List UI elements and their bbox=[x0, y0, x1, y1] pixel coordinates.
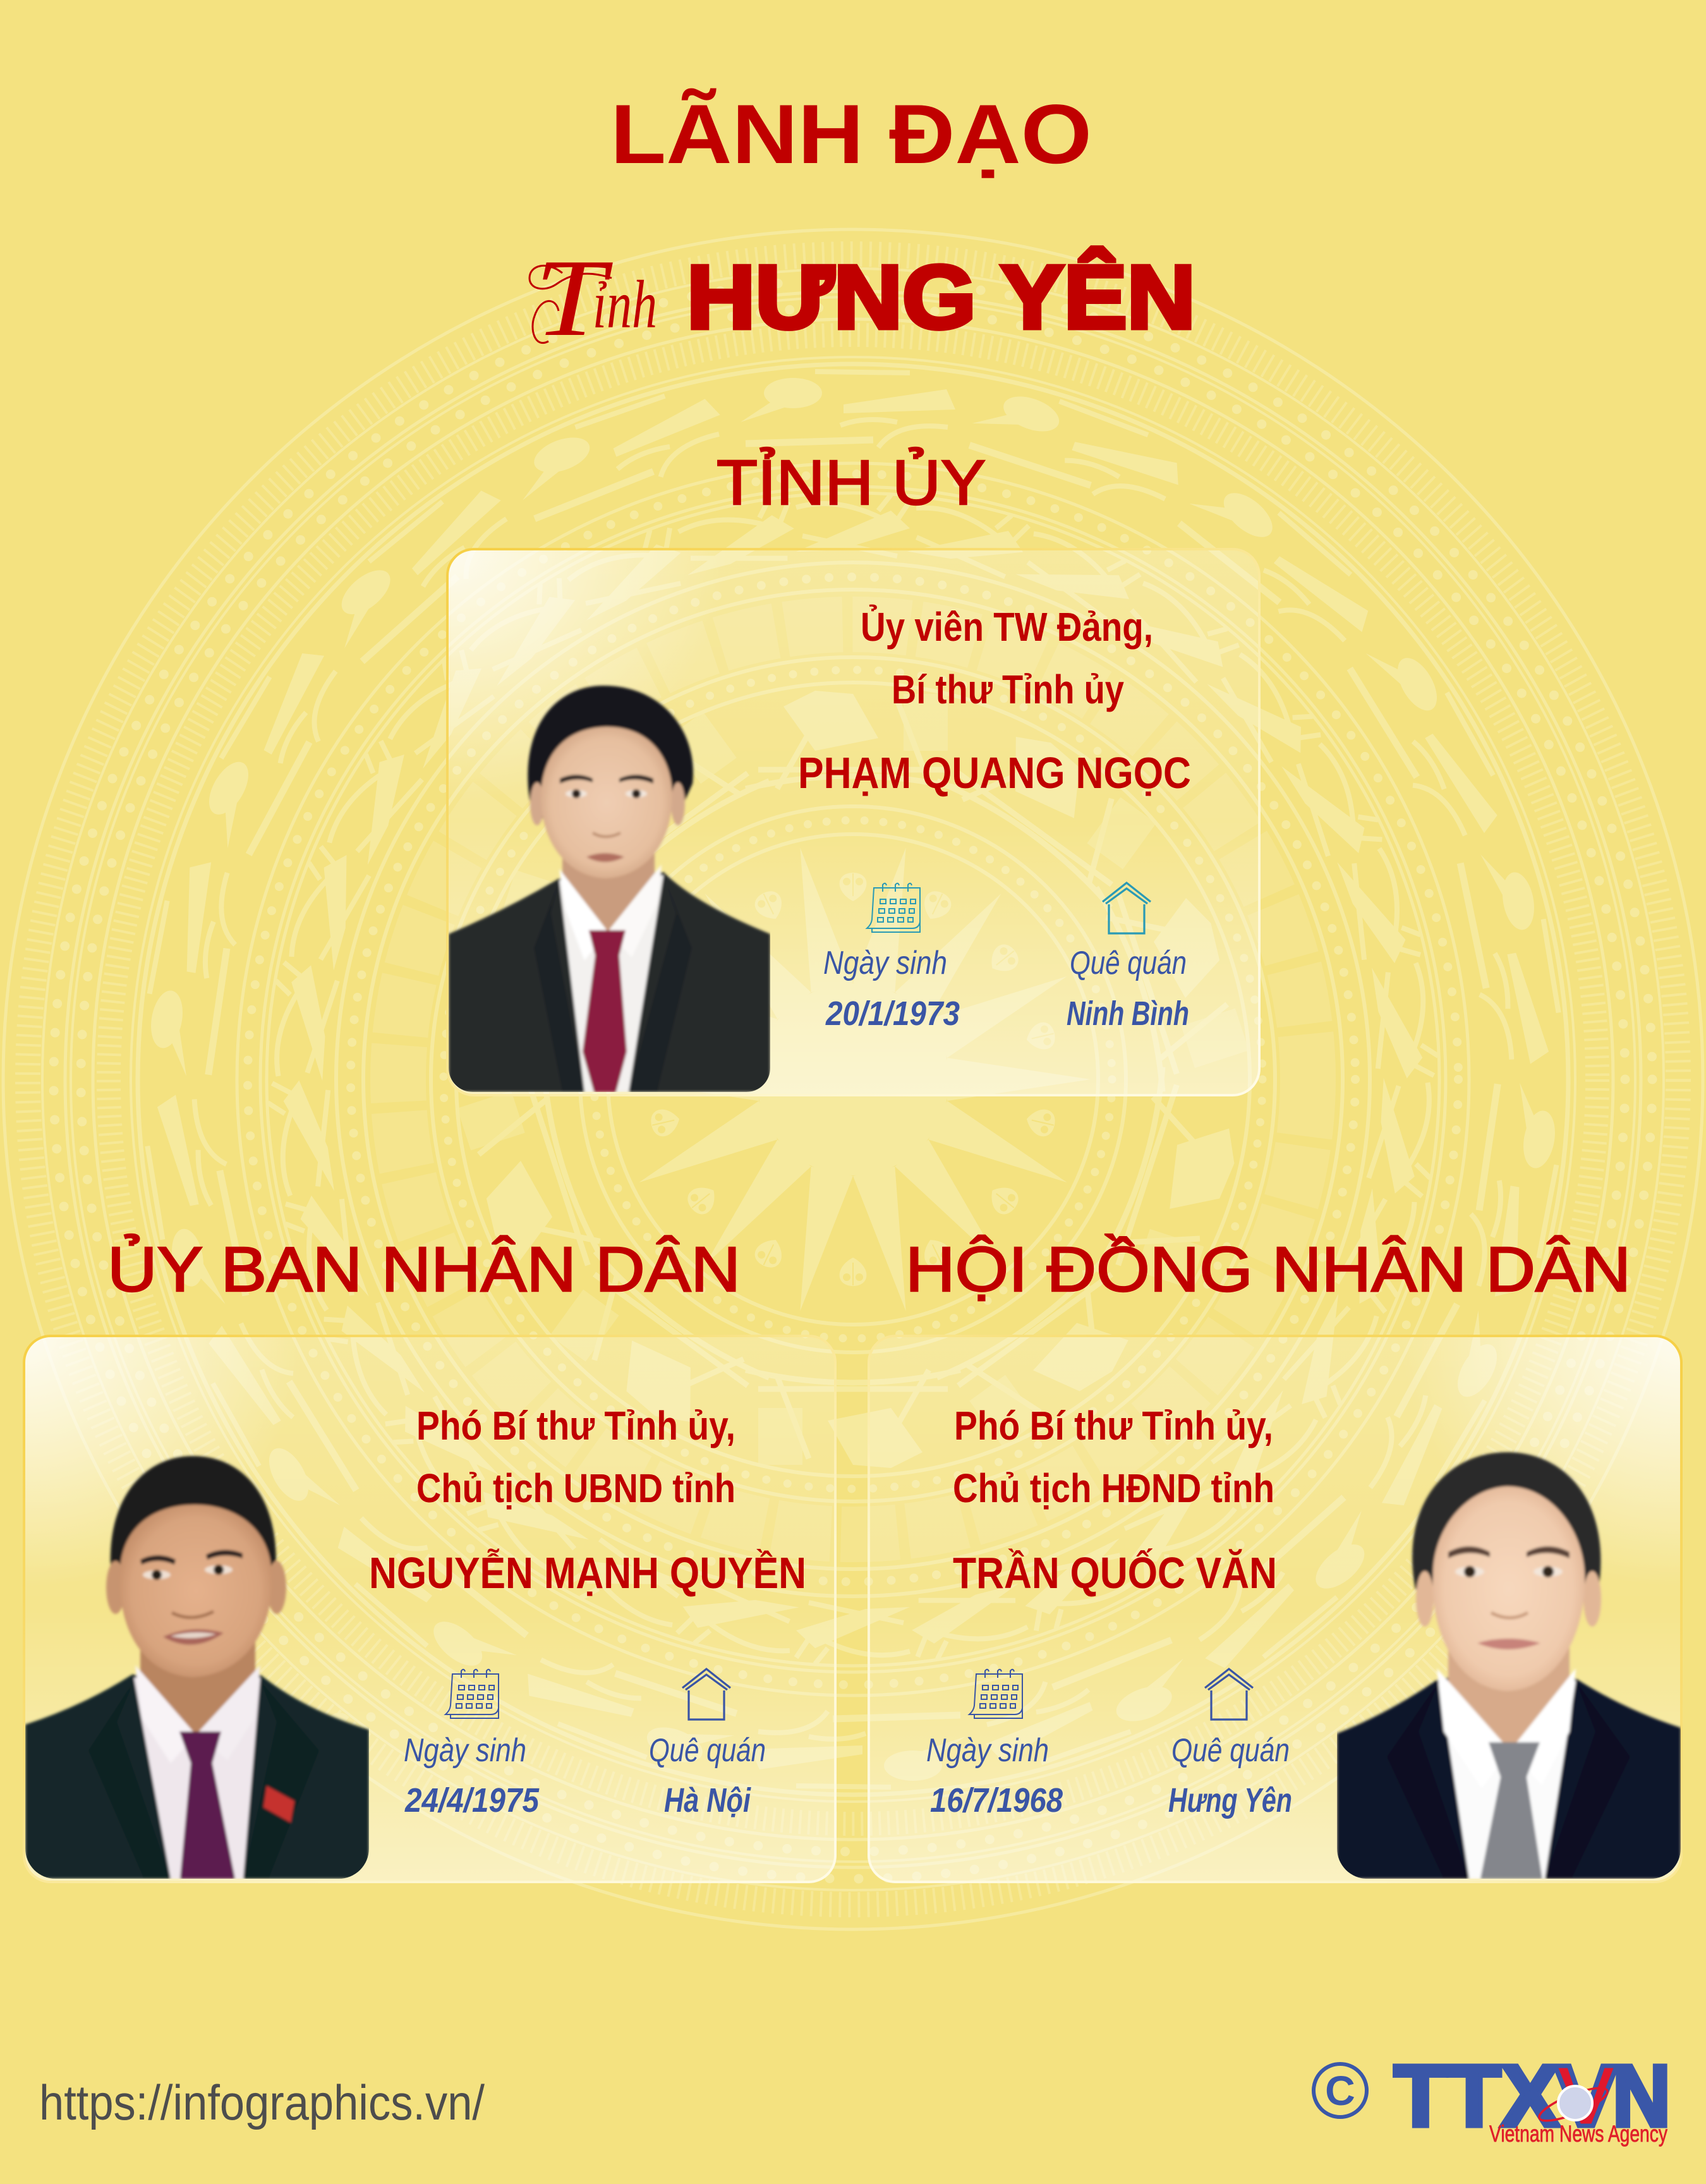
birth date: Ngày sinh bbox=[823, 945, 947, 981]
hometown: Hưng Yên bbox=[1168, 1781, 1292, 1819]
bronze drum background pattern bbox=[0, 229, 1706, 1929]
copyright mark: C bbox=[1325, 2067, 1355, 2114]
letters TTX: TTX bbox=[1394, 2048, 1559, 2145]
heading: TỈNH ỦY: TỈNH ỦY bbox=[717, 447, 986, 518]
bold words HƯNG YÊN: HƯNG YÊN bbox=[687, 247, 1195, 348]
panel: Tỉnh ủy card bbox=[447, 549, 1259, 1095]
hometown: Hà Nội bbox=[664, 1781, 751, 1819]
role text: Ủy viên TW Đảng, bbox=[861, 604, 1153, 650]
script word Tỉnh: ỉnh bbox=[593, 267, 657, 343]
icon: calendar bbox=[969, 1670, 1022, 1718]
birth date: 20/1/1973 bbox=[825, 995, 960, 1033]
globe bbox=[1536, 2082, 1611, 2127]
role text: Phó Bí thư Tỉnh ủy, bbox=[416, 1403, 735, 1448]
name: TRẦN QUỐC VĂN bbox=[953, 1548, 1277, 1598]
birth date bbox=[926, 1732, 1063, 1819]
birth date: Ngày sinh bbox=[926, 1732, 1049, 1769]
icon: calendar bbox=[445, 1670, 499, 1718]
portrait: Phạm Quang Ngọc bbox=[449, 686, 770, 1092]
panel: Ủy ban nhân dân card bbox=[24, 1336, 835, 1882]
role text: Chủ tịch HĐND tỉnh bbox=[953, 1465, 1274, 1511]
title: Tỉnh HƯNG YÊN bbox=[529, 236, 1195, 359]
birth date bbox=[404, 1732, 540, 1819]
birth date: 24/4/1975 bbox=[404, 1781, 540, 1819]
hometown bbox=[1168, 1732, 1292, 1819]
portrait: Trần Quốc Văn bbox=[1337, 1452, 1681, 1879]
hometown bbox=[1067, 945, 1189, 1033]
role text: Phó Bí thư Tỉnh ủy, bbox=[954, 1403, 1273, 1448]
logo: TTXVN bbox=[1394, 2048, 1671, 2147]
icon: house bbox=[1103, 883, 1151, 933]
letter V: V bbox=[1554, 2048, 1618, 2145]
name: NGUYỄN MẠNH QUYỀN bbox=[369, 1548, 806, 1598]
role text bbox=[953, 1403, 1274, 1511]
card background bbox=[24, 1336, 835, 1882]
letter N: N bbox=[1612, 2048, 1671, 2145]
panel: Hội đồng nhân dân card bbox=[869, 1336, 1681, 1882]
role text bbox=[861, 604, 1153, 712]
role text: Chủ tịch UBND tỉnh bbox=[416, 1465, 735, 1511]
portrait: Nguyễn Mạnh Quyền bbox=[25, 1456, 369, 1879]
script word Tỉnh bbox=[529, 236, 657, 359]
script word Tỉnh: T bbox=[535, 236, 613, 359]
birth date bbox=[823, 945, 960, 1033]
role text bbox=[416, 1403, 735, 1511]
birth date: Ngày sinh bbox=[404, 1732, 526, 1769]
card background bbox=[447, 549, 1259, 1095]
heading: ỦY BAN NHÂN DÂN: ỦY BAN NHÂN DÂN bbox=[107, 1234, 741, 1305]
title: LÃNH ĐẠO: LÃNH ĐẠO bbox=[610, 87, 1092, 181]
hometown: Quê quán bbox=[1070, 945, 1187, 981]
icon: calendar bbox=[867, 883, 920, 932]
icon: house bbox=[1205, 1669, 1253, 1720]
hometown bbox=[649, 1732, 766, 1819]
role text: Bí thư Tỉnh ủy bbox=[892, 667, 1124, 712]
card background bbox=[869, 1336, 1681, 1882]
heading: HỘI ĐỒNG NHÂN DÂN: HỘI ĐỒNG NHÂN DÂN bbox=[905, 1234, 1631, 1305]
footer url: https://infographics.vn/ bbox=[39, 2075, 485, 2130]
hometown: Quê quán bbox=[1171, 1732, 1290, 1769]
birth date: 16/7/1968 bbox=[930, 1781, 1063, 1819]
icon: house bbox=[682, 1669, 730, 1720]
hometown: Ninh Bình bbox=[1067, 995, 1189, 1033]
hometown: Quê quán bbox=[649, 1732, 766, 1769]
copyright mark bbox=[1314, 2064, 1367, 2117]
name: PHẠM QUANG NGỌC bbox=[798, 748, 1191, 798]
